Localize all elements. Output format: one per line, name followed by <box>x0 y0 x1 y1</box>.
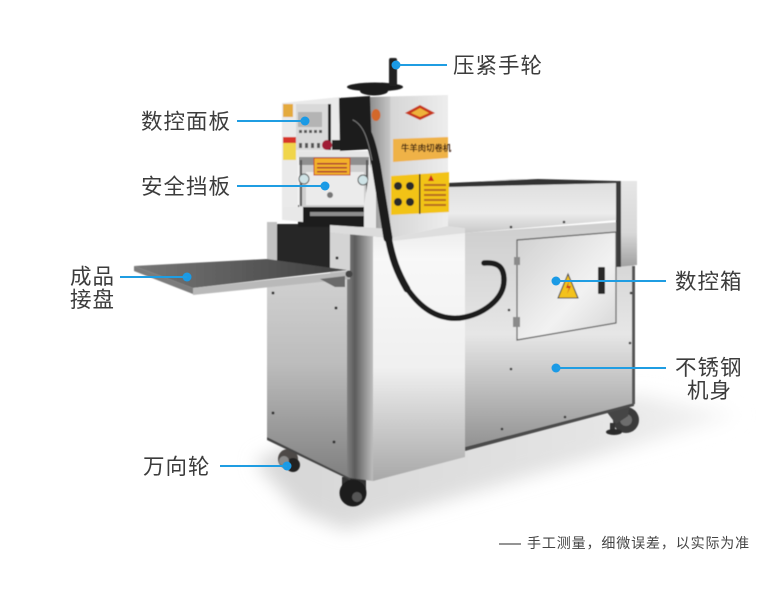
callout: 万向轮: 万向轮 <box>143 455 211 479</box>
rear body lower edge <box>465 403 634 451</box>
head right panel <box>370 95 448 238</box>
floor shadow <box>255 395 740 530</box>
centre front face <box>373 228 465 481</box>
base plate <box>330 225 392 238</box>
callout: 不锈钢机身: 不锈钢 <box>675 356 743 380</box>
upper hopper section <box>448 179 617 236</box>
callout: 压紧手轮: 压紧手轮 <box>453 54 543 78</box>
door handle <box>598 267 605 294</box>
product label: 牛羊肉切卷机 <box>401 143 452 153</box>
small orange tag <box>283 104 293 117</box>
guard side brackets <box>283 157 376 232</box>
slot under guard <box>298 205 370 227</box>
head left panel <box>282 97 340 220</box>
warning triangle <box>558 274 578 298</box>
left column <box>267 272 347 477</box>
cable <box>351 118 504 318</box>
door hinges <box>513 257 520 327</box>
callout: 数控面板: 数控面板 <box>141 110 231 134</box>
black block <box>339 96 372 151</box>
machine illustration <box>134 58 639 506</box>
rivets <box>272 221 632 444</box>
callout: 万向轮 <box>143 455 292 479</box>
centre caster <box>340 477 366 506</box>
callout: 数控箱 <box>552 270 743 294</box>
head lower plate <box>392 226 465 241</box>
front swivel caster <box>278 449 300 472</box>
logo diamond <box>405 105 435 120</box>
guard surround <box>298 151 372 157</box>
callout: 数控箱: 数控箱 <box>675 270 743 294</box>
callout: 成品接盘 <box>70 265 192 312</box>
callout: 不锈钢机身: 机身 <box>687 379 732 403</box>
rear post <box>617 181 637 267</box>
blade bar <box>310 212 366 216</box>
small warning tag <box>283 137 296 160</box>
warning sign <box>391 172 449 215</box>
tray <box>134 259 352 295</box>
rear caster <box>606 404 639 435</box>
door: control box <box>517 232 616 340</box>
chute block behind tray <box>267 222 277 266</box>
callout: 安全挡板: 安全挡板 <box>141 175 231 199</box>
orange knob <box>372 109 380 121</box>
callout: 数控面板 <box>141 110 310 134</box>
hand wheel <box>347 58 403 96</box>
callout: 压紧手轮 <box>392 54 543 78</box>
callout: 不锈钢机身 <box>552 356 743 403</box>
safety guard <box>299 157 369 207</box>
callout: 安全挡板 <box>141 175 330 199</box>
callout: 成品接盘: 成品 <box>70 265 115 289</box>
product label <box>393 137 452 162</box>
callout: 成品接盘: 接盘 <box>70 288 115 312</box>
footnote: 手工测量，细微误差，以实际为准 <box>527 535 750 551</box>
control panel <box>296 104 340 150</box>
rear body side <box>465 221 634 447</box>
